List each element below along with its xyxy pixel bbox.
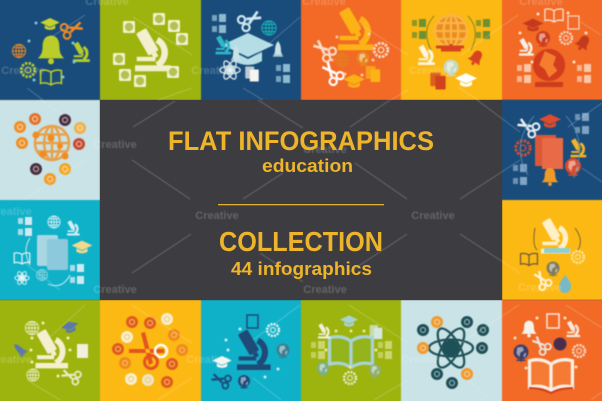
orbit [534, 228, 580, 250]
dots [30, 322, 72, 378]
icon: scissors [311, 37, 337, 63]
icon: bell [573, 33, 593, 53]
panel: navy tile with documents [513, 113, 589, 186]
icon: cap [455, 73, 477, 87]
icon: microscope [570, 138, 586, 157]
icon: book [545, 9, 563, 22]
icon: flower [572, 251, 584, 263]
panel: lime tile with microscope [11, 319, 88, 385]
panel: navy tile with graduation cap [212, 8, 290, 83]
icon: scissors [129, 332, 167, 368]
panel: pale blue tile with globe [14, 113, 86, 185]
icon: large globe [533, 49, 565, 81]
icon: globe [12, 44, 26, 58]
icon: document [568, 16, 579, 29]
panel: orange tile with book [514, 314, 585, 393]
icon: rocket [273, 41, 283, 57]
icon: microscope [318, 323, 331, 338]
icon: document [77, 344, 88, 358]
subtitle: education [262, 155, 353, 176]
watermark: Creative market: Creative [303, 144, 347, 156]
icon: water drop [559, 275, 571, 293]
icon: scissors [60, 18, 84, 40]
icon: cap [539, 114, 561, 128]
icon: flower [344, 372, 356, 384]
icon: globe [514, 344, 528, 362]
icon: microscope [135, 28, 171, 71]
panel: teal tile with microscope [210, 315, 290, 389]
icon: flower [267, 324, 279, 336]
icon: bell [542, 168, 558, 186]
icon: scissors [237, 8, 263, 32]
icon: scissors [531, 269, 553, 291]
icon: book [521, 253, 537, 266]
watermark: Creative market: Creative [1, 65, 45, 77]
icon: cap [72, 241, 92, 253]
icon: scissors [515, 115, 541, 139]
icon: rocket [231, 45, 241, 61]
icon: bell [38, 36, 64, 64]
watermark: Creative market: Creative [186, 354, 230, 366]
icon: cap [40, 18, 60, 30]
icon: cap [60, 319, 80, 335]
icon: book [330, 337, 372, 368]
central dark panel [100, 100, 502, 300]
globe dots [32, 132, 68, 160]
icon: book [530, 360, 572, 390]
icon: globe [554, 338, 566, 350]
icon: globe [356, 52, 370, 66]
icon: globe [238, 375, 250, 389]
icon: book shadow [529, 388, 573, 393]
icon: globe [536, 31, 550, 47]
icon: microscope [566, 321, 580, 337]
icon: microscope [67, 220, 80, 236]
divider line [218, 204, 384, 205]
icon: globe [48, 216, 60, 228]
panel: yellow tile with scissors [112, 313, 188, 388]
watermark: Creative market: Creative [409, 65, 453, 77]
icon: atom [429, 325, 473, 371]
connector dots [28, 22, 76, 82]
panel: teal tile with documents [14, 216, 92, 286]
panel: yellow tile with microscope [521, 218, 584, 293]
icon: document [247, 315, 258, 328]
icon: microscope [418, 45, 435, 65]
icon: microscope [73, 42, 90, 62]
panel: navy tile with bell [12, 18, 90, 85]
icon: scissors [530, 334, 552, 356]
icon: globe [546, 262, 560, 276]
orbit [26, 238, 70, 286]
icon: microscope [541, 218, 570, 254]
icon: globe [27, 369, 39, 381]
icon: documents [535, 135, 563, 169]
icon: document [547, 314, 559, 328]
icon: document [430, 72, 446, 90]
icon: globe base [535, 82, 563, 87]
list items [513, 113, 589, 185]
icon: globe [276, 344, 290, 358]
orbit [520, 116, 579, 178]
icon: book [444, 60, 458, 77]
icon: flower [573, 345, 585, 357]
icon: globe [25, 321, 39, 335]
panel: orange tile with red globe [517, 9, 593, 87]
microscope base [544, 248, 570, 253]
dots [224, 328, 280, 378]
icon: cap [222, 33, 274, 65]
icon: globe [317, 362, 329, 376]
icon: microscope [519, 38, 534, 56]
icon: globe stand [436, 44, 464, 50]
panel: orange tile with microscope [311, 7, 388, 88]
watermark: Creative market: Creative [401, 354, 445, 366]
watermark: Creative market: Creative [518, 282, 562, 294]
list items [18, 217, 84, 284]
icon: book [41, 70, 61, 85]
icon: book [14, 253, 30, 264]
icon: microscope [36, 329, 68, 368]
icon: cap [340, 315, 358, 327]
watermark: Creative market: Creative [191, 65, 235, 77]
icon: globe [435, 15, 467, 47]
side tile backgrounds [0, 100, 602, 300]
icon: microscope [338, 7, 374, 50]
icon: globe [565, 158, 581, 176]
icon: atom [21, 63, 35, 77]
list items [412, 19, 490, 39]
icon: cap [523, 19, 543, 31]
panel: lime tile with book [311, 315, 392, 384]
icon: globe [262, 21, 276, 35]
icon: document [245, 66, 259, 82]
icon: globe [36, 270, 48, 280]
icon: document [370, 325, 382, 339]
icon: scissors [60, 367, 82, 385]
watermark: Creative market: Creative [93, 284, 137, 296]
panel: pale tile with atom [417, 316, 489, 389]
icon: globe [35, 126, 69, 160]
heading: collection: COLLECTION [219, 226, 383, 257]
watermark: Creative market: Creative [93, 139, 137, 151]
icon: cap [521, 321, 537, 337]
icon: atom [220, 59, 240, 81]
icon: microscope [237, 329, 271, 370]
icon badges [112, 313, 188, 388]
icon: flower [560, 32, 572, 44]
icon: stand [369, 364, 381, 378]
title: FLAT INFOGRAPHICS [168, 126, 434, 156]
panel: yellow tile with globe [412, 15, 490, 89]
dots [518, 12, 588, 64]
icon badges [14, 113, 86, 185]
icon: flower [374, 43, 388, 57]
icon: atom [15, 270, 29, 286]
top row tile backgrounds [0, 0, 602, 100]
dots [324, 330, 378, 368]
watermark: Creative market: Creative [411, 210, 455, 222]
icon: document [366, 66, 380, 82]
orbit [427, 16, 475, 50]
panel: lime tile with microscope [113, 13, 188, 87]
watermark: Creative market: Creative [303, 284, 347, 296]
icon badges [417, 316, 489, 389]
icon: cap [343, 74, 365, 88]
icon: globe [335, 53, 349, 67]
dots [330, 32, 374, 76]
icon: flower [516, 141, 530, 155]
subheading: count: 44 infographics [231, 258, 372, 279]
list items [311, 341, 392, 359]
list items [212, 14, 290, 83]
icon: documents [37, 235, 68, 270]
icon: cap [212, 356, 232, 368]
icon: microscope [216, 35, 231, 54]
icon: scissors [210, 371, 232, 389]
icon badges [113, 13, 188, 87]
list items [517, 64, 591, 83]
watermark: Creative market: Creative [195, 210, 239, 222]
icon: bell [466, 48, 486, 68]
bottom row tile backgrounds [0, 300, 602, 401]
icon: scissors [319, 60, 345, 86]
icon: rocket [11, 341, 28, 358]
dots [514, 316, 578, 370]
